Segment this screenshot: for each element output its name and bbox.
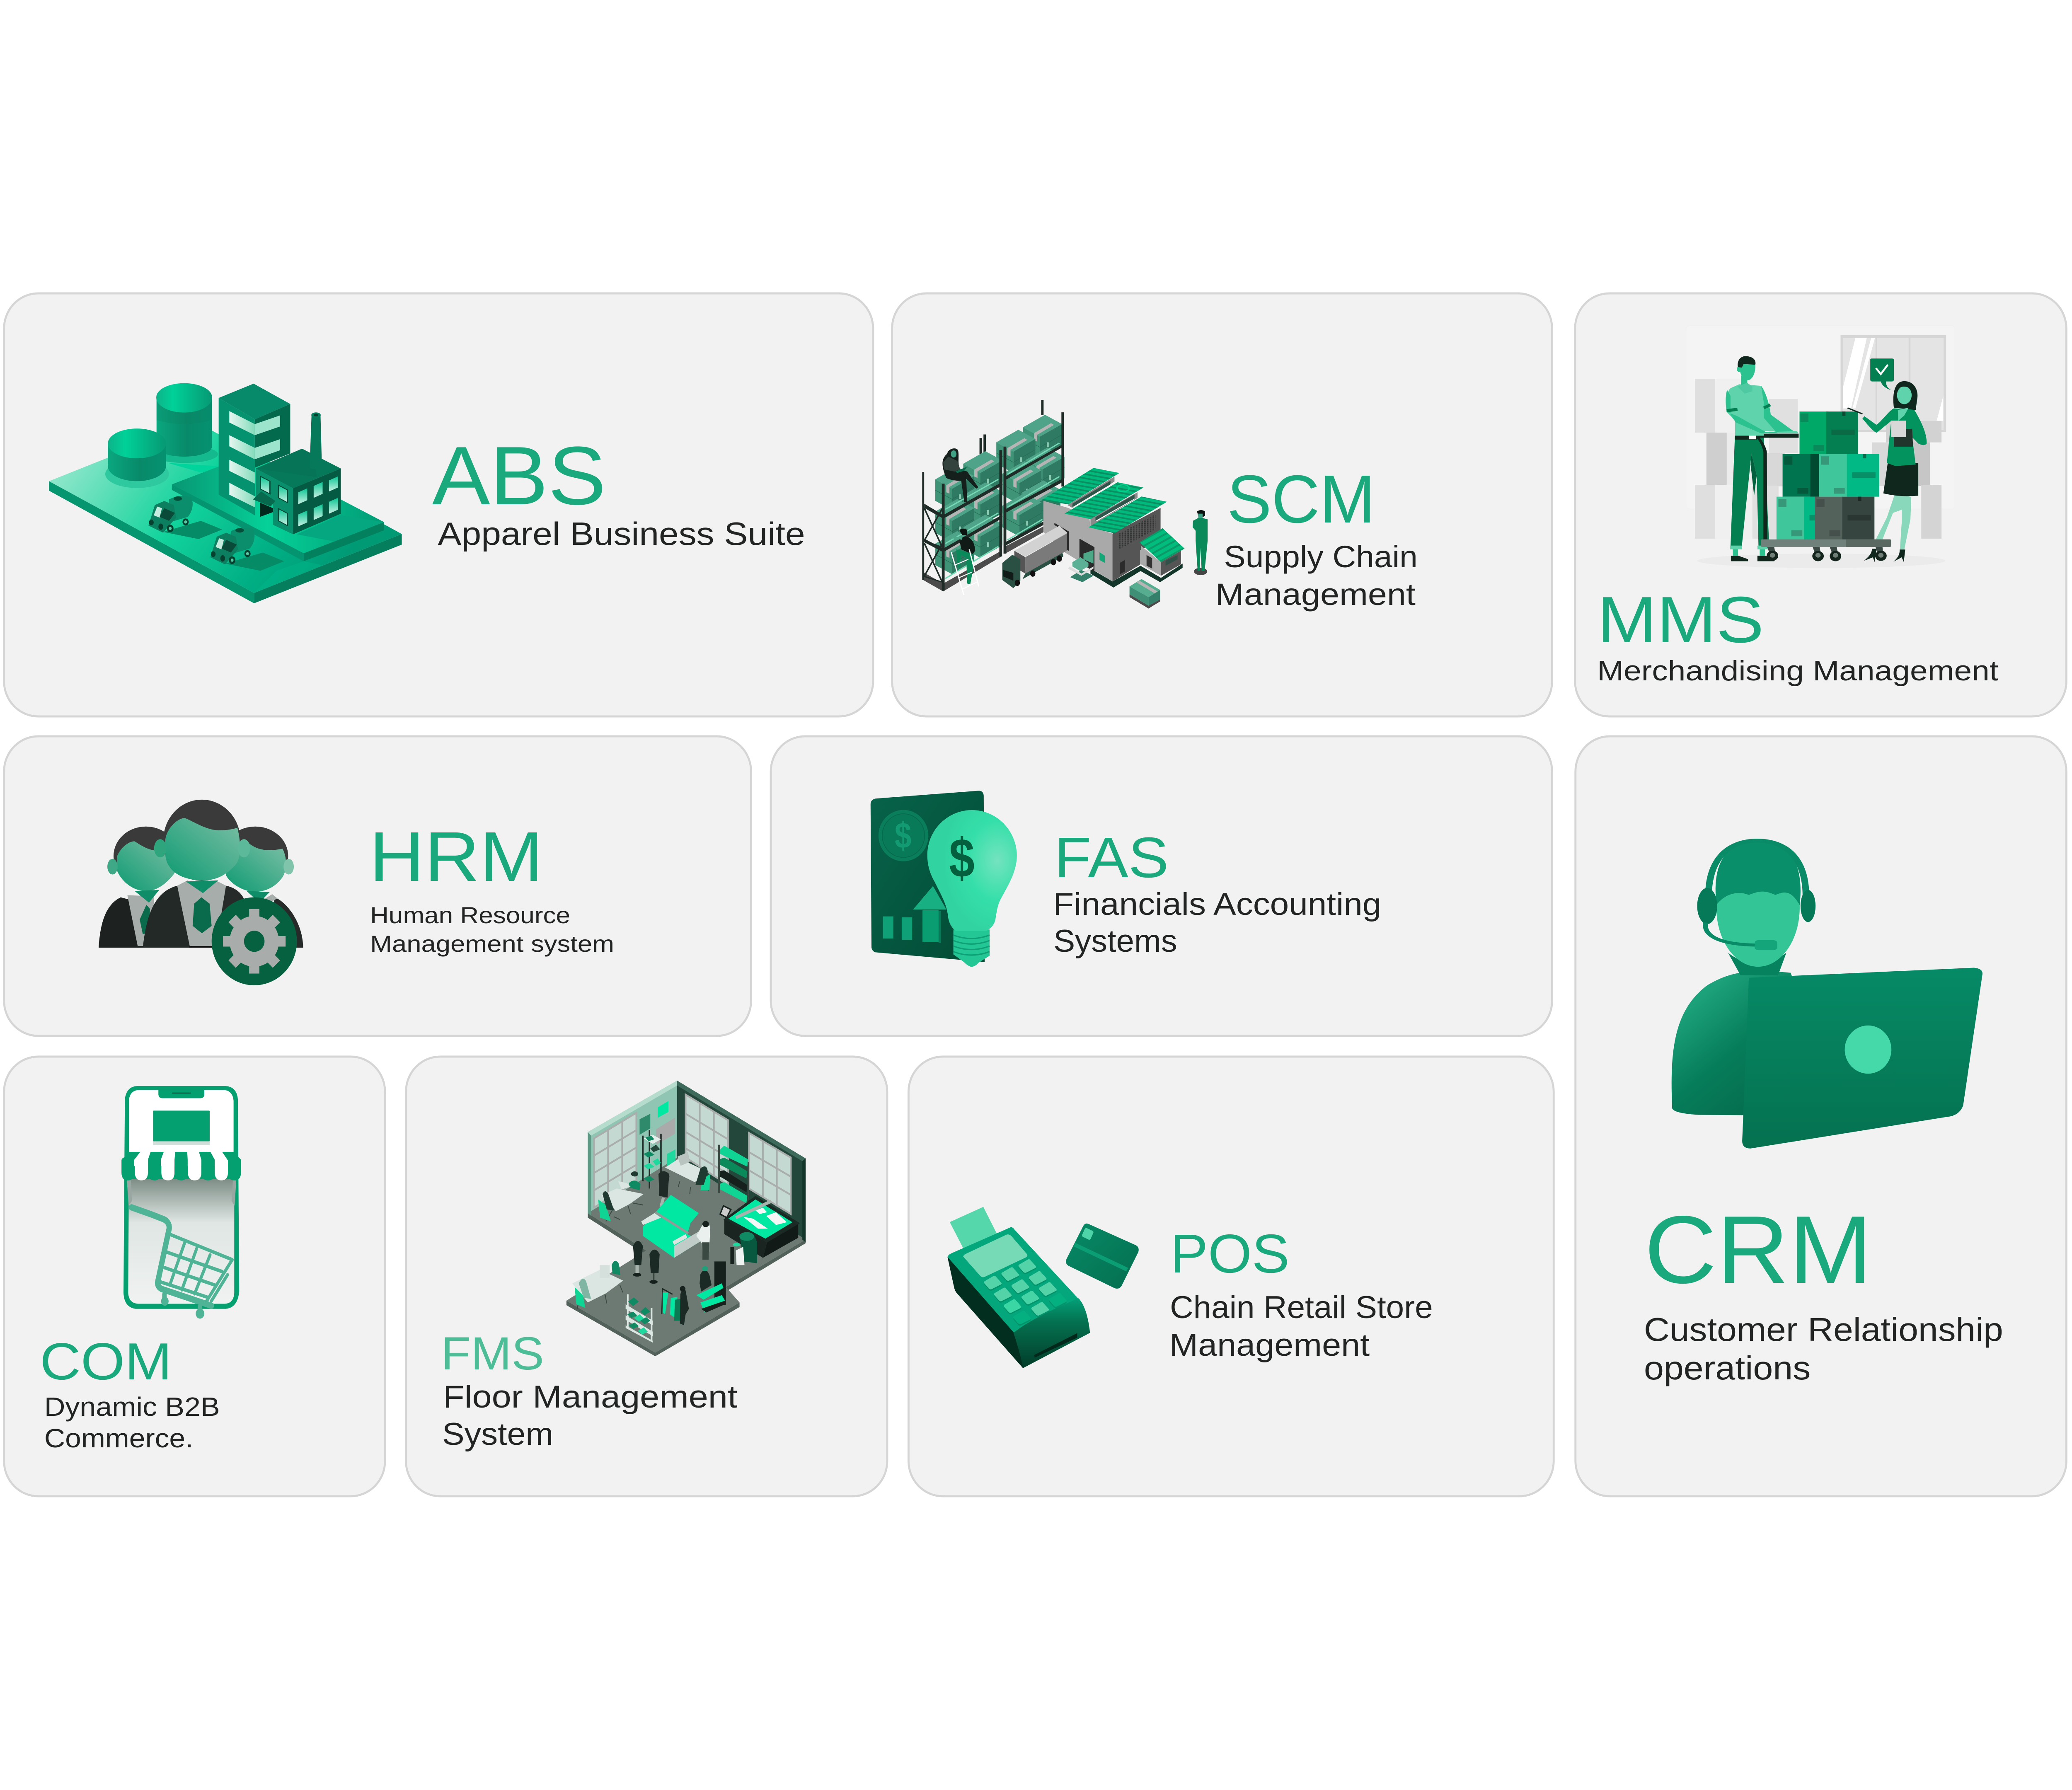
text: Supply Chain Management: Supply Chain (1224, 540, 1418, 574)
panel: SCM (892, 293, 1552, 716)
text: Apparel Business Suite: Apparel Business Suite (438, 516, 805, 552)
heading: FMS: FMS (441, 1328, 544, 1379)
illustration: support agent with laptop (1672, 841, 1982, 1149)
illustration: isometric garment floor (566, 1081, 806, 1356)
card background (892, 293, 1552, 716)
text: Financials Accounting Systems (1053, 886, 1381, 958)
text: Supply Chain Management: Management (1215, 578, 1416, 612)
text: Financials Accounting Systems: Systems (1053, 923, 1177, 958)
panel: CRM (1576, 736, 2066, 1496)
illustration: phone shop with cart (121, 1086, 241, 1318)
text: Customer Relationship operations (1644, 1311, 2003, 1386)
text: Chain Retail Store Management (1169, 1289, 1433, 1362)
panel: MMS (1575, 293, 2066, 716)
text: Supply Chain Management (1215, 540, 1418, 612)
text: Dynamic B2B Commerce.: Dynamic B2B (44, 1392, 220, 1422)
text: Human Resource Management system: Human Resource (370, 902, 570, 928)
panel: POS (908, 1057, 1554, 1496)
heading: FAS: FAS (1054, 825, 1169, 889)
text: Human Resource Management system (370, 902, 614, 957)
text: Floor Management System: Floor Management (443, 1379, 738, 1414)
heading: HRM: HRM (369, 817, 543, 896)
panel: FAS (771, 736, 1552, 1036)
illustration: three staff and gear (99, 800, 303, 985)
card background (908, 1057, 1554, 1496)
illustration: report and dollar light bulb: $ (895, 815, 911, 856)
illustration: staff checking boxes on a trolley (1686, 326, 1955, 568)
text: Human Resource Management system: Management system (370, 931, 614, 957)
illustration: report and dollar light bulb: $ (949, 827, 975, 889)
heading: MMS: MMS (1597, 583, 1764, 656)
panel: HRM (4, 736, 751, 1036)
text: Chain Retail Store Management: Management (1169, 1327, 1370, 1362)
text: Dynamic B2B Commerce.: Commerce. (44, 1424, 193, 1453)
text: Financials Accounting Systems: Financials Accounting (1053, 886, 1381, 922)
text: Floor Management System: System (442, 1416, 553, 1451)
illustration: warehouse and racks (923, 400, 1208, 609)
text: Dynamic B2B Commerce. (44, 1392, 220, 1453)
text: Floor Management System (442, 1379, 738, 1451)
heading: CRM: CRM (1644, 1196, 1872, 1304)
card background (4, 293, 873, 716)
text: Customer Relationship operations: operations (1644, 1350, 1811, 1386)
panel: FMS (406, 1057, 887, 1496)
heading: ABS: ABS (432, 429, 606, 522)
illustration: isometric factory (49, 383, 402, 603)
illustration: payment terminal and card (947, 1207, 1139, 1368)
card background (4, 736, 751, 1036)
card background (771, 736, 1552, 1036)
text: Chain Retail Store Management: Chain Retail Store (1170, 1289, 1433, 1325)
panel: COM (4, 1057, 385, 1496)
card background (1576, 736, 2066, 1496)
card background (4, 1057, 385, 1496)
text: Merchandising Management: Merchandising Management (1597, 655, 1999, 687)
text: Customer Relationship operations: Customer Relationship (1644, 1311, 2003, 1348)
heading: SCM: SCM (1227, 462, 1375, 537)
card background (1575, 293, 2066, 716)
panel: ABS (4, 293, 873, 716)
heading: POS: POS (1170, 1223, 1290, 1284)
illustration: report and dollar light bulb (871, 791, 1017, 967)
card background (406, 1057, 887, 1496)
heading: COM: COM (40, 1333, 172, 1391)
